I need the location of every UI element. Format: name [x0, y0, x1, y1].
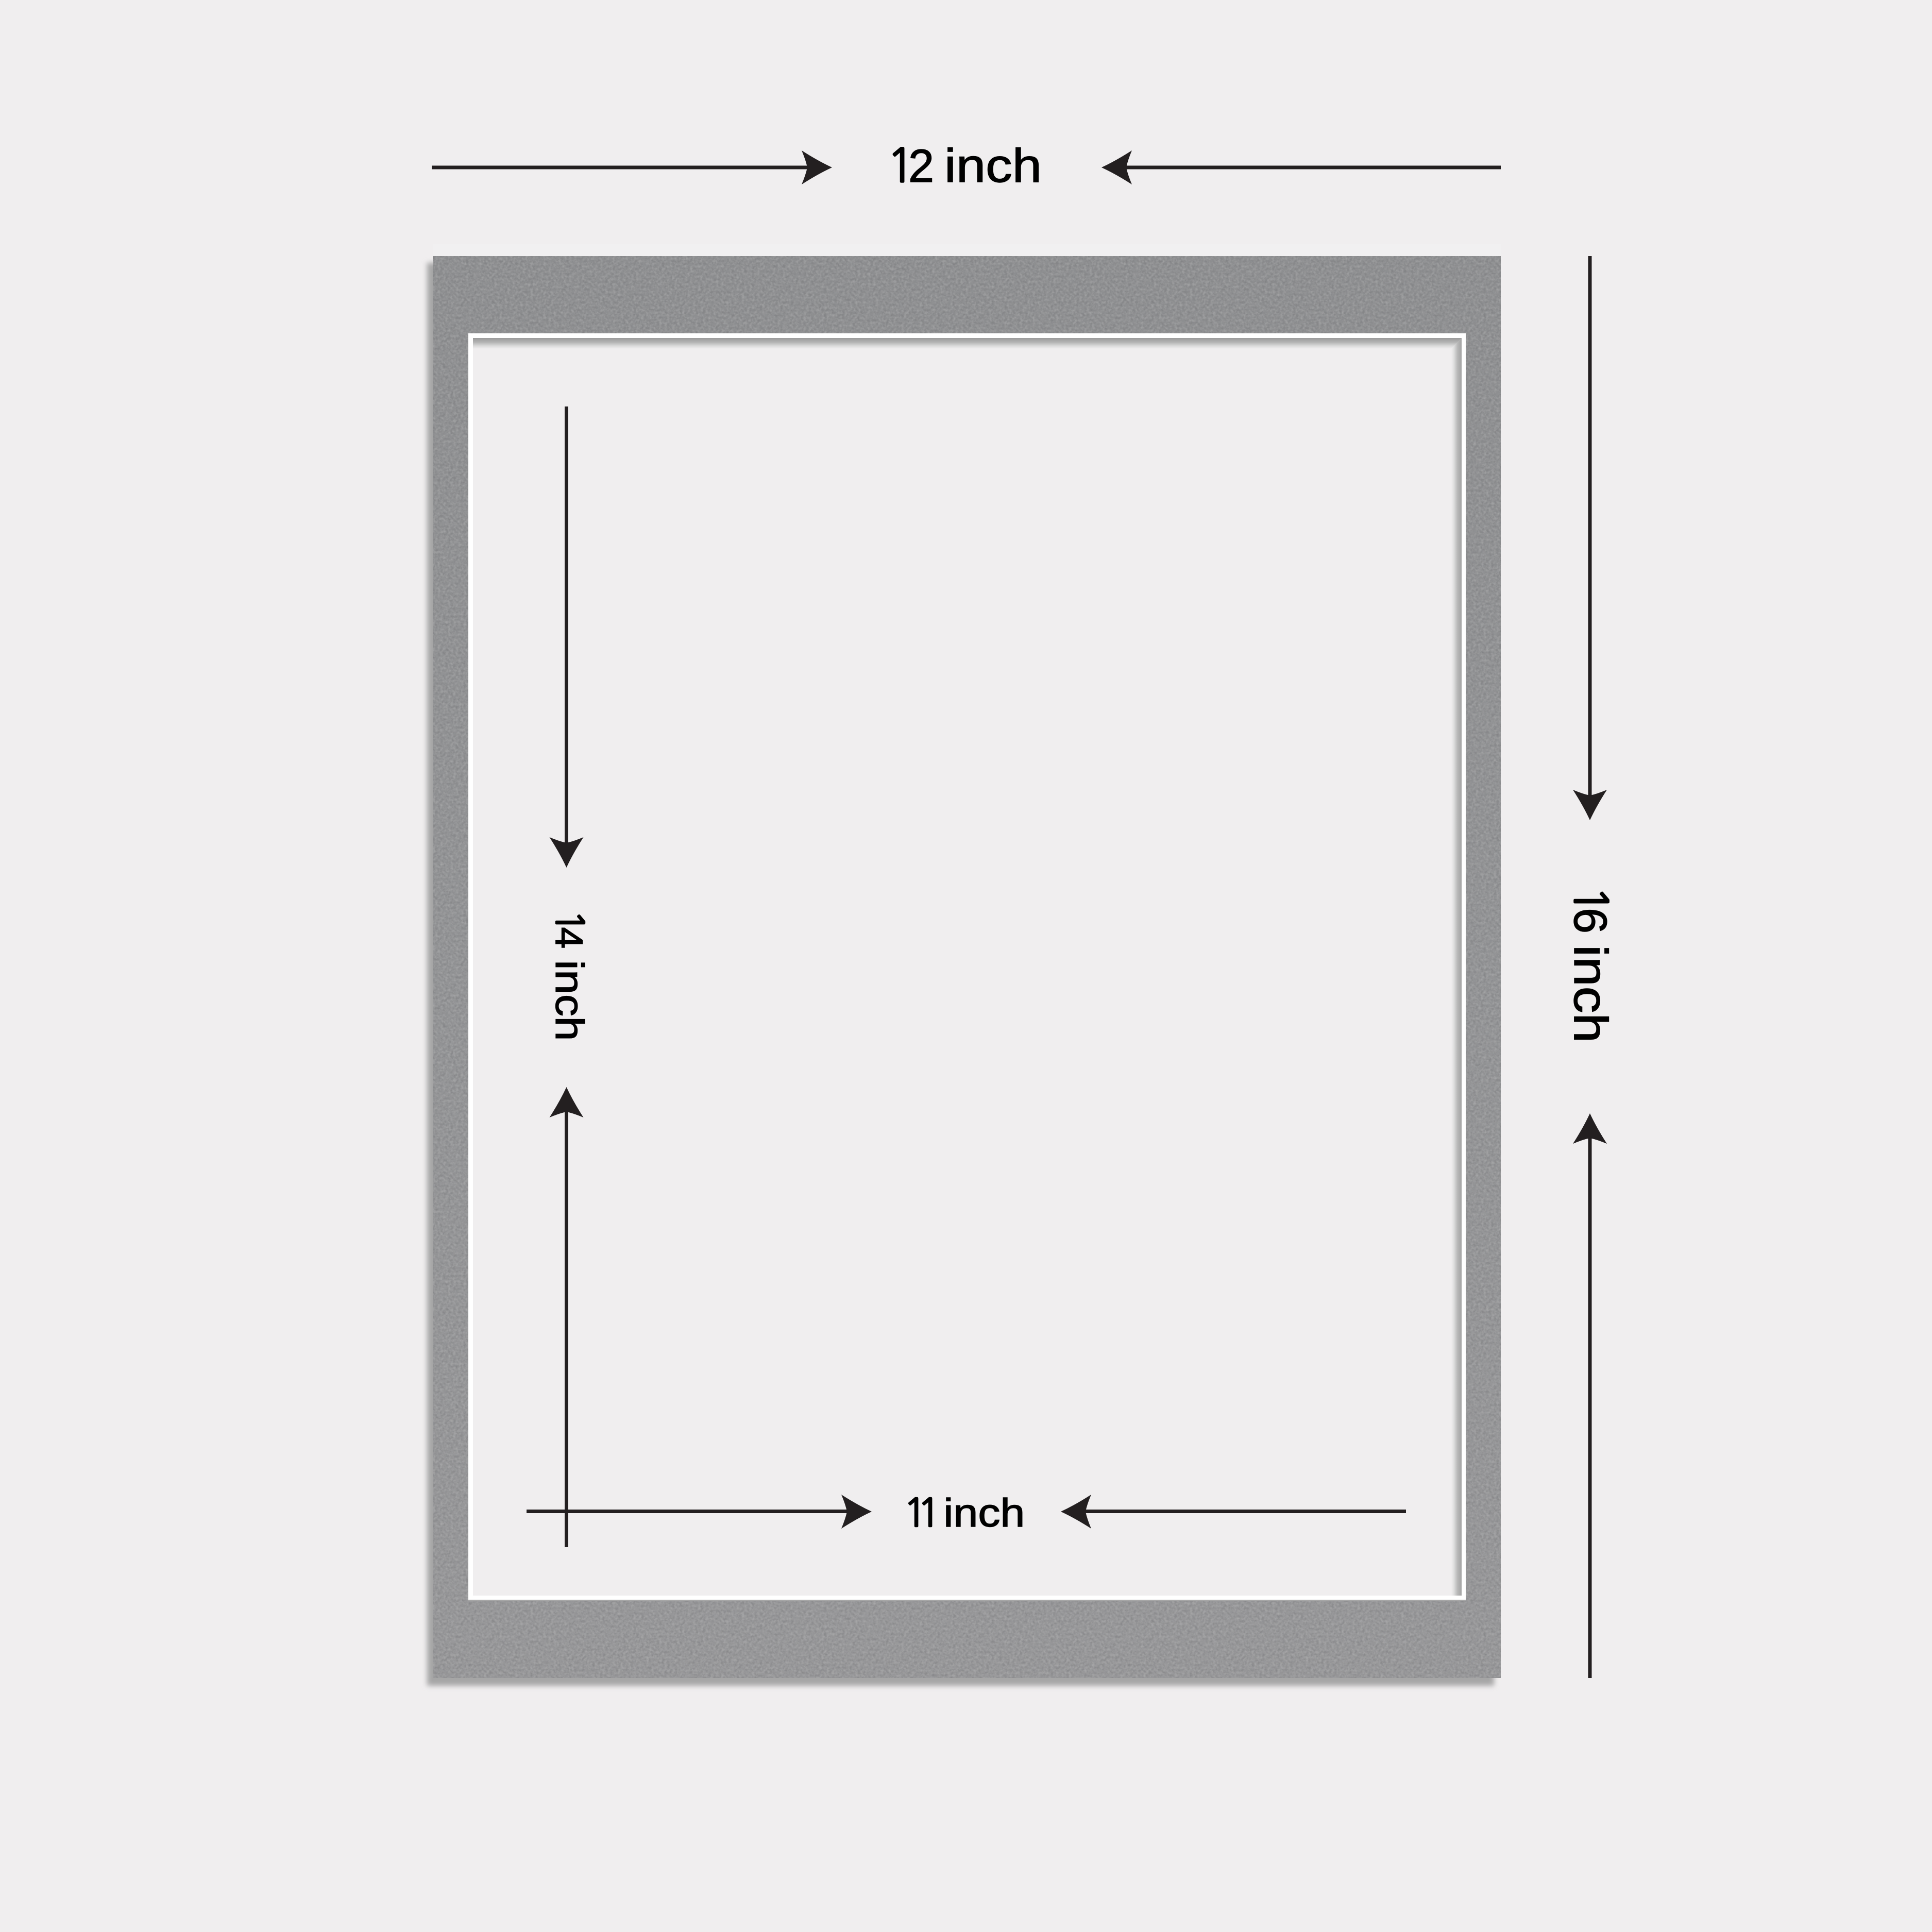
label: 16 inch: 6	[1564, 908, 1616, 934]
arrow: right side pointing down	[1573, 256, 1607, 820]
label: 14 inch: inch	[547, 960, 591, 1041]
dimension: 11 inch window width	[527, 1491, 1406, 1535]
label: 14 inch: 1	[550, 910, 589, 933]
arrow: top right pointing left	[1101, 150, 1501, 184]
mat highlight	[433, 244, 1501, 256]
mat drop shadow	[427, 263, 1494, 1686]
dimension: 16 inch outer height	[1564, 256, 1617, 1678]
window white bevel	[468, 333, 1466, 1600]
label: 12 inch: 1	[887, 142, 915, 189]
mat board with window opening	[433, 256, 1501, 1678]
inner shadow top	[473, 338, 1462, 349]
window interior	[473, 338, 1462, 1596]
dimension: 12 inch outer width	[432, 140, 1501, 192]
inner shadow right	[1451, 338, 1462, 1596]
arrow: right side pointing up	[1573, 1113, 1607, 1678]
label: 12 inch: inch	[944, 140, 1042, 192]
panel: grey photo mat	[427, 244, 1501, 1686]
label: 16 inch: inch	[1564, 945, 1617, 1043]
label: 12 inch: 2	[908, 141, 934, 192]
arrow: inner left pointing down	[549, 406, 583, 868]
label: 11 inch: 1	[904, 1494, 927, 1532]
label: 16 inch: 1	[1568, 886, 1614, 914]
label: 11 inch: inch	[943, 1491, 1025, 1535]
label: 14 inch: 4	[548, 927, 591, 948]
label: 11 inch: 1	[917, 1494, 941, 1532]
dimension: 14 inch window height	[547, 406, 591, 1547]
arrow: top left pointing right	[432, 150, 832, 184]
arrow: inner bottom pointing left	[1061, 1495, 1406, 1529]
arrow: inner left pointing up	[549, 1087, 583, 1547]
arrow: inner bottom pointing right	[527, 1495, 872, 1529]
